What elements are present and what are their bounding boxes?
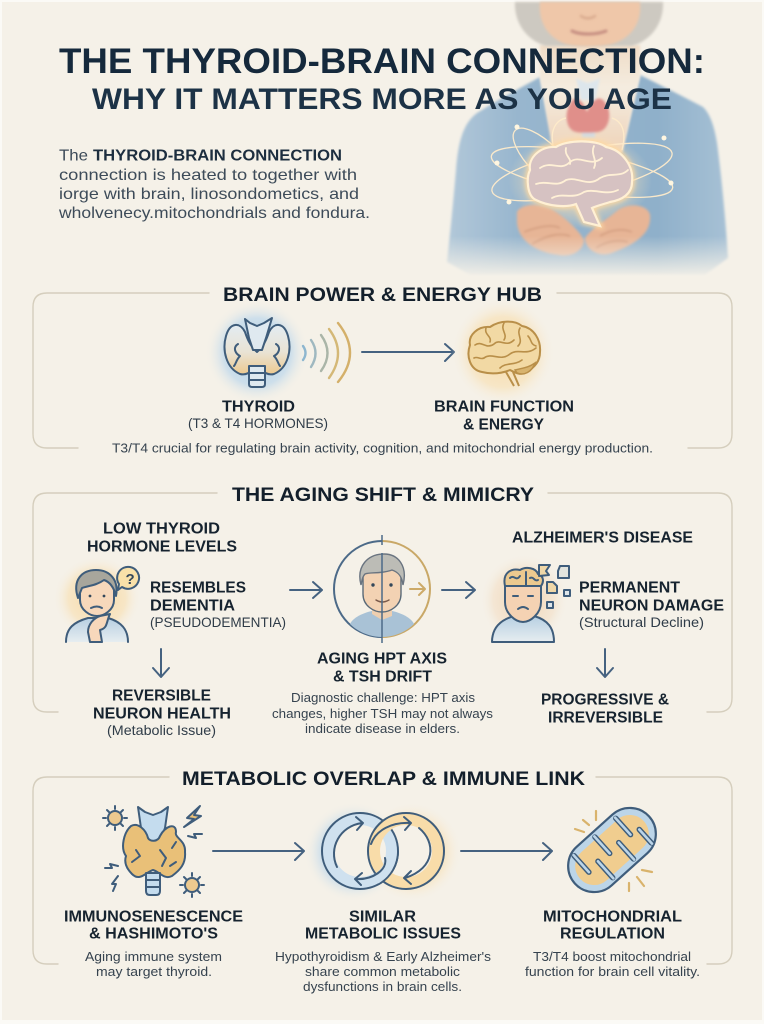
sweater xyxy=(447,75,728,275)
heading: METABOLIC OVERLAP & IMMUNE LINK xyxy=(182,769,585,790)
text: t3/t4 boost: T3/T4 boost mitochondrial xyxy=(533,950,691,964)
text: hypothyroidism: dysfunctions in brain cells. xyxy=(303,980,462,994)
intro text block xyxy=(58,148,370,222)
description: T3/T4 crucial for regulating brain activity, cognition, and mitochondrial energy production. xyxy=(112,442,653,456)
arrow xyxy=(362,344,454,361)
text: t3/t4 boost: function for brain cell vitality. xyxy=(525,965,700,979)
panel: metabolic overlap and immune link xyxy=(33,769,732,994)
text: resembles dementia: RESEMBLES xyxy=(150,580,246,596)
intro text block: THYROID-BRAIN CONNECTION xyxy=(93,148,342,164)
text: reversible neuron health: NEURON HEALTH xyxy=(93,706,231,722)
icon: brain xyxy=(451,298,555,406)
panel: brain power and energy hub xyxy=(33,285,732,456)
brain glow xyxy=(508,132,652,228)
text: t3/t4 boost xyxy=(525,950,700,979)
text: hypothyroidism: Hypothyroidism & Early Alzheimer's xyxy=(275,950,491,964)
title line 1: THE THYROID-BRAIN CONNECTION: xyxy=(59,42,705,81)
column heading: low thyroid xyxy=(87,520,237,556)
text: aging immune system xyxy=(85,950,222,979)
icon: mitochondrion xyxy=(557,797,667,903)
label: immunosenescence xyxy=(64,908,243,942)
column heading: low thyroid: LOW THYROID xyxy=(103,520,220,538)
immune cell xyxy=(103,806,127,830)
label: immunosenescence: IMMUNOSENESCENCE xyxy=(64,908,243,926)
intro text block: connection is heated to together with xyxy=(59,167,357,184)
text: hypothyroidism: share common metabolic xyxy=(305,965,460,979)
label: brain function: BRAIN FUNCTION xyxy=(434,398,574,416)
neck and chest xyxy=(540,45,640,152)
icon: inflamed thyroid xyxy=(103,806,204,897)
text: diagnostic challenge xyxy=(272,691,493,736)
icon: confused person: ? xyxy=(126,571,135,588)
icon: thyroid xyxy=(205,300,309,404)
text: permanent neuron damage: PERMANENT xyxy=(579,580,680,596)
label: brain function xyxy=(434,398,574,434)
text: aging hpt axis xyxy=(317,650,447,686)
text: diagnostic challenge: indicate disease in elders. xyxy=(305,722,460,736)
text: permanent neuron damage: NEURON DAMAGE xyxy=(579,598,724,614)
orbits xyxy=(487,118,677,213)
text: hypothyroidism xyxy=(275,950,491,994)
text: reversible neuron health xyxy=(93,688,231,738)
text: aging hpt axis: & TSH DRIFT xyxy=(333,668,432,686)
text: aging hpt axis: AGING HPT AXIS xyxy=(317,650,447,668)
immune cell xyxy=(180,873,204,897)
label: similar metabolic issues: SIMILAR xyxy=(349,908,416,926)
arrow down xyxy=(153,649,169,677)
label: thyroid xyxy=(188,398,328,431)
heading: BRAIN POWER & ENERGY HUB xyxy=(223,285,542,306)
label: brain function: & ENERGY xyxy=(463,416,544,434)
heading: THE AGING SHIFT & MIMICRY xyxy=(232,485,534,506)
intro text block: The xyxy=(59,148,88,164)
text: aging immune system: Aging immune system xyxy=(85,950,222,964)
icon: linked cycle rings xyxy=(304,802,462,902)
arrow xyxy=(290,582,322,598)
label: thyroid: THYROID xyxy=(222,398,295,416)
text: aging immune system: may target thyroid. xyxy=(96,965,212,979)
label: immunosenescence: & HASHIMOTO'S xyxy=(89,926,218,942)
label: thyroid: (T3 & T4 HORMONES) xyxy=(188,415,328,431)
text: resembles dementia: DEMENTIA xyxy=(150,598,235,614)
text: resembles dementia: (PSEUDODEMENTIA) xyxy=(150,614,286,630)
icon: confused person xyxy=(53,556,141,642)
column heading: alzheimer's: ALZHEIMER'S DISEASE xyxy=(512,530,693,546)
label: similar metabolic issues: METABOLIC ISSUES xyxy=(305,926,461,942)
smile and nose xyxy=(572,16,606,34)
arrow xyxy=(442,582,475,598)
text: reversible neuron health: REVERSIBLE xyxy=(112,688,211,704)
panel: aging shift and mimicry xyxy=(33,485,732,738)
text: diagnostic challenge: Diagnostic challenge: HPT axis xyxy=(291,691,475,705)
text: progressive and irreversible: IRREVERSIBLE xyxy=(548,710,663,726)
intro text block: wholvenecy.mitochondrials and fondura. xyxy=(58,205,370,222)
icon: person with fragmenting brain xyxy=(480,554,570,646)
text: reversible neuron health: (Metabolic Issue) xyxy=(107,722,216,738)
hair xyxy=(515,2,663,46)
label: mitochondrial regulation: MITOCHONDRIAL xyxy=(543,908,682,926)
energy rays xyxy=(575,811,652,891)
face xyxy=(540,2,640,46)
arrow down xyxy=(597,649,613,677)
label: mitochondrial regulation: REGULATION xyxy=(560,926,665,942)
arrow xyxy=(461,843,552,860)
text: diagnostic challenge: changes, higher TSH may not always xyxy=(272,707,493,721)
orbit sparks xyxy=(494,124,674,204)
text: permanent neuron damage xyxy=(579,580,724,630)
text: progressive and irreversible xyxy=(541,692,669,726)
intro text block: iorge with brain, linosondometics, and xyxy=(59,186,359,203)
panel frame xyxy=(33,493,732,712)
text: progressive and irreversible: PROGRESSIVE & xyxy=(541,692,669,708)
arrow xyxy=(213,843,304,860)
lightning bolts xyxy=(105,806,202,891)
column heading: low thyroid: HORMONE LEVELS xyxy=(87,538,237,556)
title line 2: WHY IT MATTERS MORE AS YOU AGE xyxy=(92,83,672,116)
panel frame xyxy=(33,777,732,964)
hands xyxy=(517,205,650,256)
title xyxy=(59,42,705,116)
text: resembles dementia xyxy=(150,580,286,630)
thyroid gland xyxy=(567,78,609,138)
hero illustration: woman holding glowing brain xyxy=(430,2,750,278)
label: mitochondrial regulation xyxy=(543,908,682,942)
text: permanent neuron damage: (Structural Decline) xyxy=(579,614,704,630)
icon: signal waves xyxy=(303,323,350,382)
panel frame xyxy=(33,293,732,448)
bottom fade xyxy=(430,236,750,278)
glowing brain xyxy=(528,141,632,226)
icon: aging face in circle xyxy=(334,535,430,643)
label: similar metabolic issues xyxy=(305,908,461,942)
